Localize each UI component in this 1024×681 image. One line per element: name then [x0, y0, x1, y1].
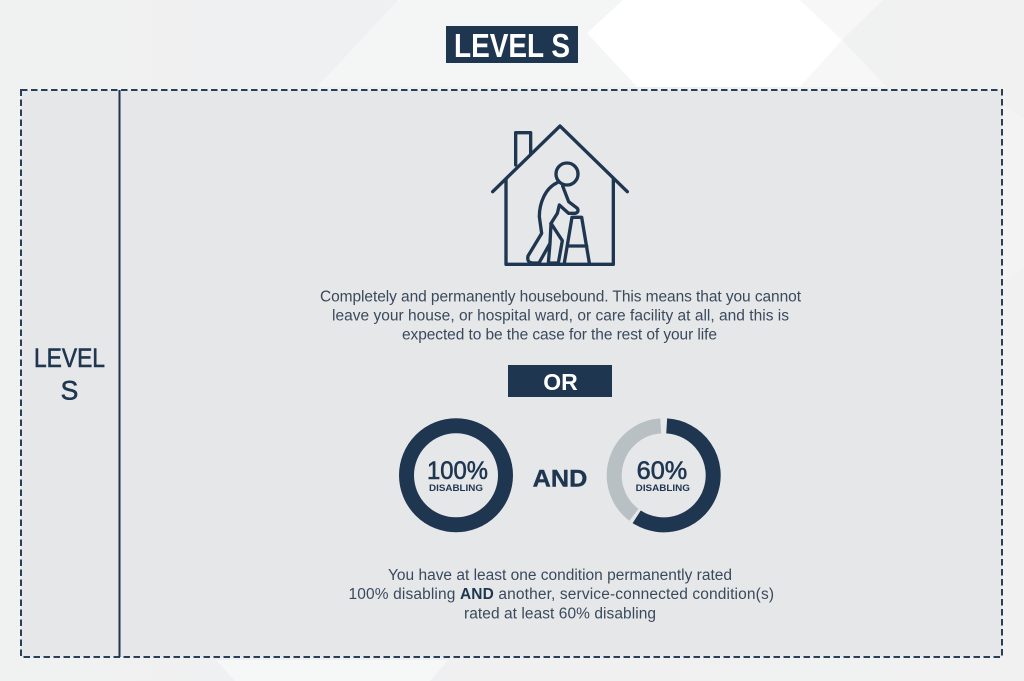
side label: LEVEL	[34, 343, 105, 373]
icon: elderly person with walker inside house	[493, 126, 627, 264]
text block: housebound description: leave your house, or hospital ward, or care facility at all, and this is	[332, 308, 789, 324]
text block: housebound description: Completely and permanently housebound. This means that you cannot	[320, 288, 802, 306]
OR badge: OR	[543, 369, 578, 395]
text block: rating description: rated at least 60% disabling	[464, 606, 656, 622]
side label	[34, 343, 105, 406]
donut chart: 60% disabling: DISABLING	[636, 483, 690, 494]
donut chart: 100% disabling	[406, 426, 506, 525]
title badge: LEVEL S	[454, 27, 570, 64]
donut chart: 100% disabling: DISABLING	[429, 483, 483, 494]
donut chart: 60% disabling	[614, 426, 713, 525]
text block: housebound description	[320, 288, 802, 344]
side label: S	[61, 376, 78, 406]
text block: housebound description: expected to be the case for the rest of your life	[402, 326, 717, 344]
OR badge	[508, 365, 612, 397]
AND connector: AND	[533, 466, 587, 493]
donut chart: 60% disabling: 60%	[637, 457, 687, 485]
text block: rating description: 100% disabling AND another, service-connected condition(s)	[348, 586, 774, 603]
panel: level S criteria	[21, 90, 1002, 657]
text block: rating description	[348, 567, 774, 622]
donut chart: 100% disabling: 100%	[427, 457, 488, 485]
text block: rating description: You have at least one condition permanently rated	[388, 567, 732, 584]
